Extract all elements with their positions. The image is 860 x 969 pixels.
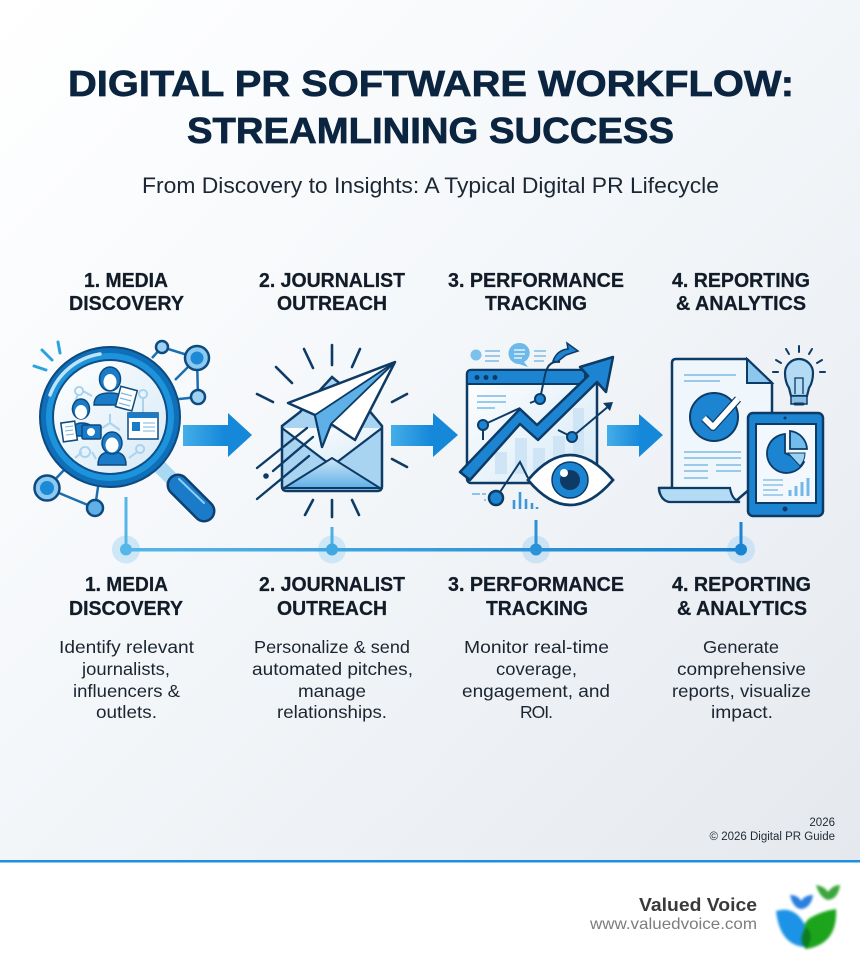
magnifier handle bbox=[157, 464, 204, 511]
step 1 description bbox=[59, 574, 194, 722]
timeline connector bbox=[112, 497, 755, 564]
step 3 description: coverage, bbox=[496, 659, 577, 679]
arrow 3 bbox=[607, 414, 663, 457]
step 2 description: 2. JOURNALIST bbox=[259, 574, 405, 596]
title: STREAMLINING SUCCESS bbox=[187, 110, 674, 151]
top headings: & ANALYTICS bbox=[676, 293, 806, 315]
step 4 description: impact. bbox=[711, 702, 773, 722]
brand text: Valued Voice bbox=[639, 894, 757, 915]
chat bubbles bbox=[470, 343, 546, 367]
step 2 description: relationships. bbox=[277, 702, 387, 722]
brand text bbox=[589, 894, 757, 933]
step 3 description: engagement, and bbox=[462, 681, 610, 701]
step 3 description: ROI. bbox=[520, 702, 553, 722]
step 1 description: Identify relevant bbox=[59, 637, 194, 657]
eye bbox=[528, 455, 613, 505]
person: left with camera bbox=[61, 399, 101, 442]
step 1 description: outlets. bbox=[96, 702, 157, 722]
step 2 description: automated pitches, bbox=[252, 659, 413, 679]
step 4 description: reports, visualize bbox=[672, 681, 811, 701]
logo bbox=[776, 885, 840, 949]
step 3 description: 3. PERFORMANCE bbox=[448, 574, 624, 596]
step 2 description bbox=[252, 574, 413, 722]
step 1 description: journalists, bbox=[81, 659, 170, 679]
title bbox=[68, 63, 794, 151]
icon: report, tablet and lightbulb bbox=[659, 346, 825, 516]
trend arrow bbox=[460, 357, 613, 480]
step 1 description: 1. MEDIA bbox=[85, 574, 168, 596]
step 2 description: manage bbox=[298, 681, 366, 701]
top headings: 4. REPORTING bbox=[672, 270, 810, 292]
step 3 description bbox=[448, 574, 624, 722]
icon: magnifying glass with media network bbox=[34, 341, 209, 516]
step 3 description: Monitor real-time bbox=[464, 637, 609, 657]
step 3 description: TRACKING bbox=[486, 598, 588, 620]
copyright note bbox=[710, 817, 835, 843]
top headings: TRACKING bbox=[485, 293, 587, 315]
tablet bbox=[748, 413, 823, 516]
top headings: 3. PERFORMANCE bbox=[448, 270, 624, 292]
icon: performance chart window with arrow and eye bbox=[460, 343, 613, 509]
top headings: DISCOVERY bbox=[69, 293, 185, 315]
title: DIGITAL PR SOFTWARE WORKFLOW: bbox=[68, 63, 794, 104]
person: bottom bbox=[98, 432, 126, 465]
top headings: OUTREACH bbox=[277, 293, 387, 315]
step 2 description: Personalize & send bbox=[254, 637, 410, 657]
top headings: 2. JOURNALIST bbox=[259, 270, 405, 292]
subtitle: From Discovery to Insights: A Typical Digital PR Lifecycle bbox=[142, 173, 719, 198]
brand text: www.valuedvoice.com bbox=[589, 916, 757, 933]
step 1 description: DISCOVERY bbox=[69, 598, 184, 620]
copyright note: © 2026 Digital PR Guide bbox=[710, 831, 835, 843]
footer white band bbox=[0, 862, 860, 969]
step 2 description: OUTREACH bbox=[277, 598, 387, 620]
arrow 1 bbox=[183, 413, 252, 457]
step 4 description bbox=[672, 574, 811, 722]
step 1 description: influencers & bbox=[73, 681, 180, 701]
top headings: 1. MEDIA bbox=[84, 270, 168, 292]
step 4 description: 4. REPORTING bbox=[672, 574, 811, 596]
footer blue rule bbox=[0, 860, 860, 862]
lightbulb bbox=[773, 346, 825, 404]
person: top bbox=[94, 367, 137, 411]
document bbox=[659, 359, 772, 502]
copyright note: 2026 bbox=[809, 817, 835, 829]
icon: envelope and paper plane bbox=[257, 345, 407, 517]
step 4 description: comprehensive bbox=[677, 659, 806, 679]
top headings bbox=[69, 270, 810, 315]
step 4 description: Generate bbox=[703, 637, 779, 657]
arrow 2 bbox=[391, 413, 458, 457]
step 4 description: & ANALYTICS bbox=[677, 598, 807, 620]
browser window bbox=[128, 413, 158, 439]
